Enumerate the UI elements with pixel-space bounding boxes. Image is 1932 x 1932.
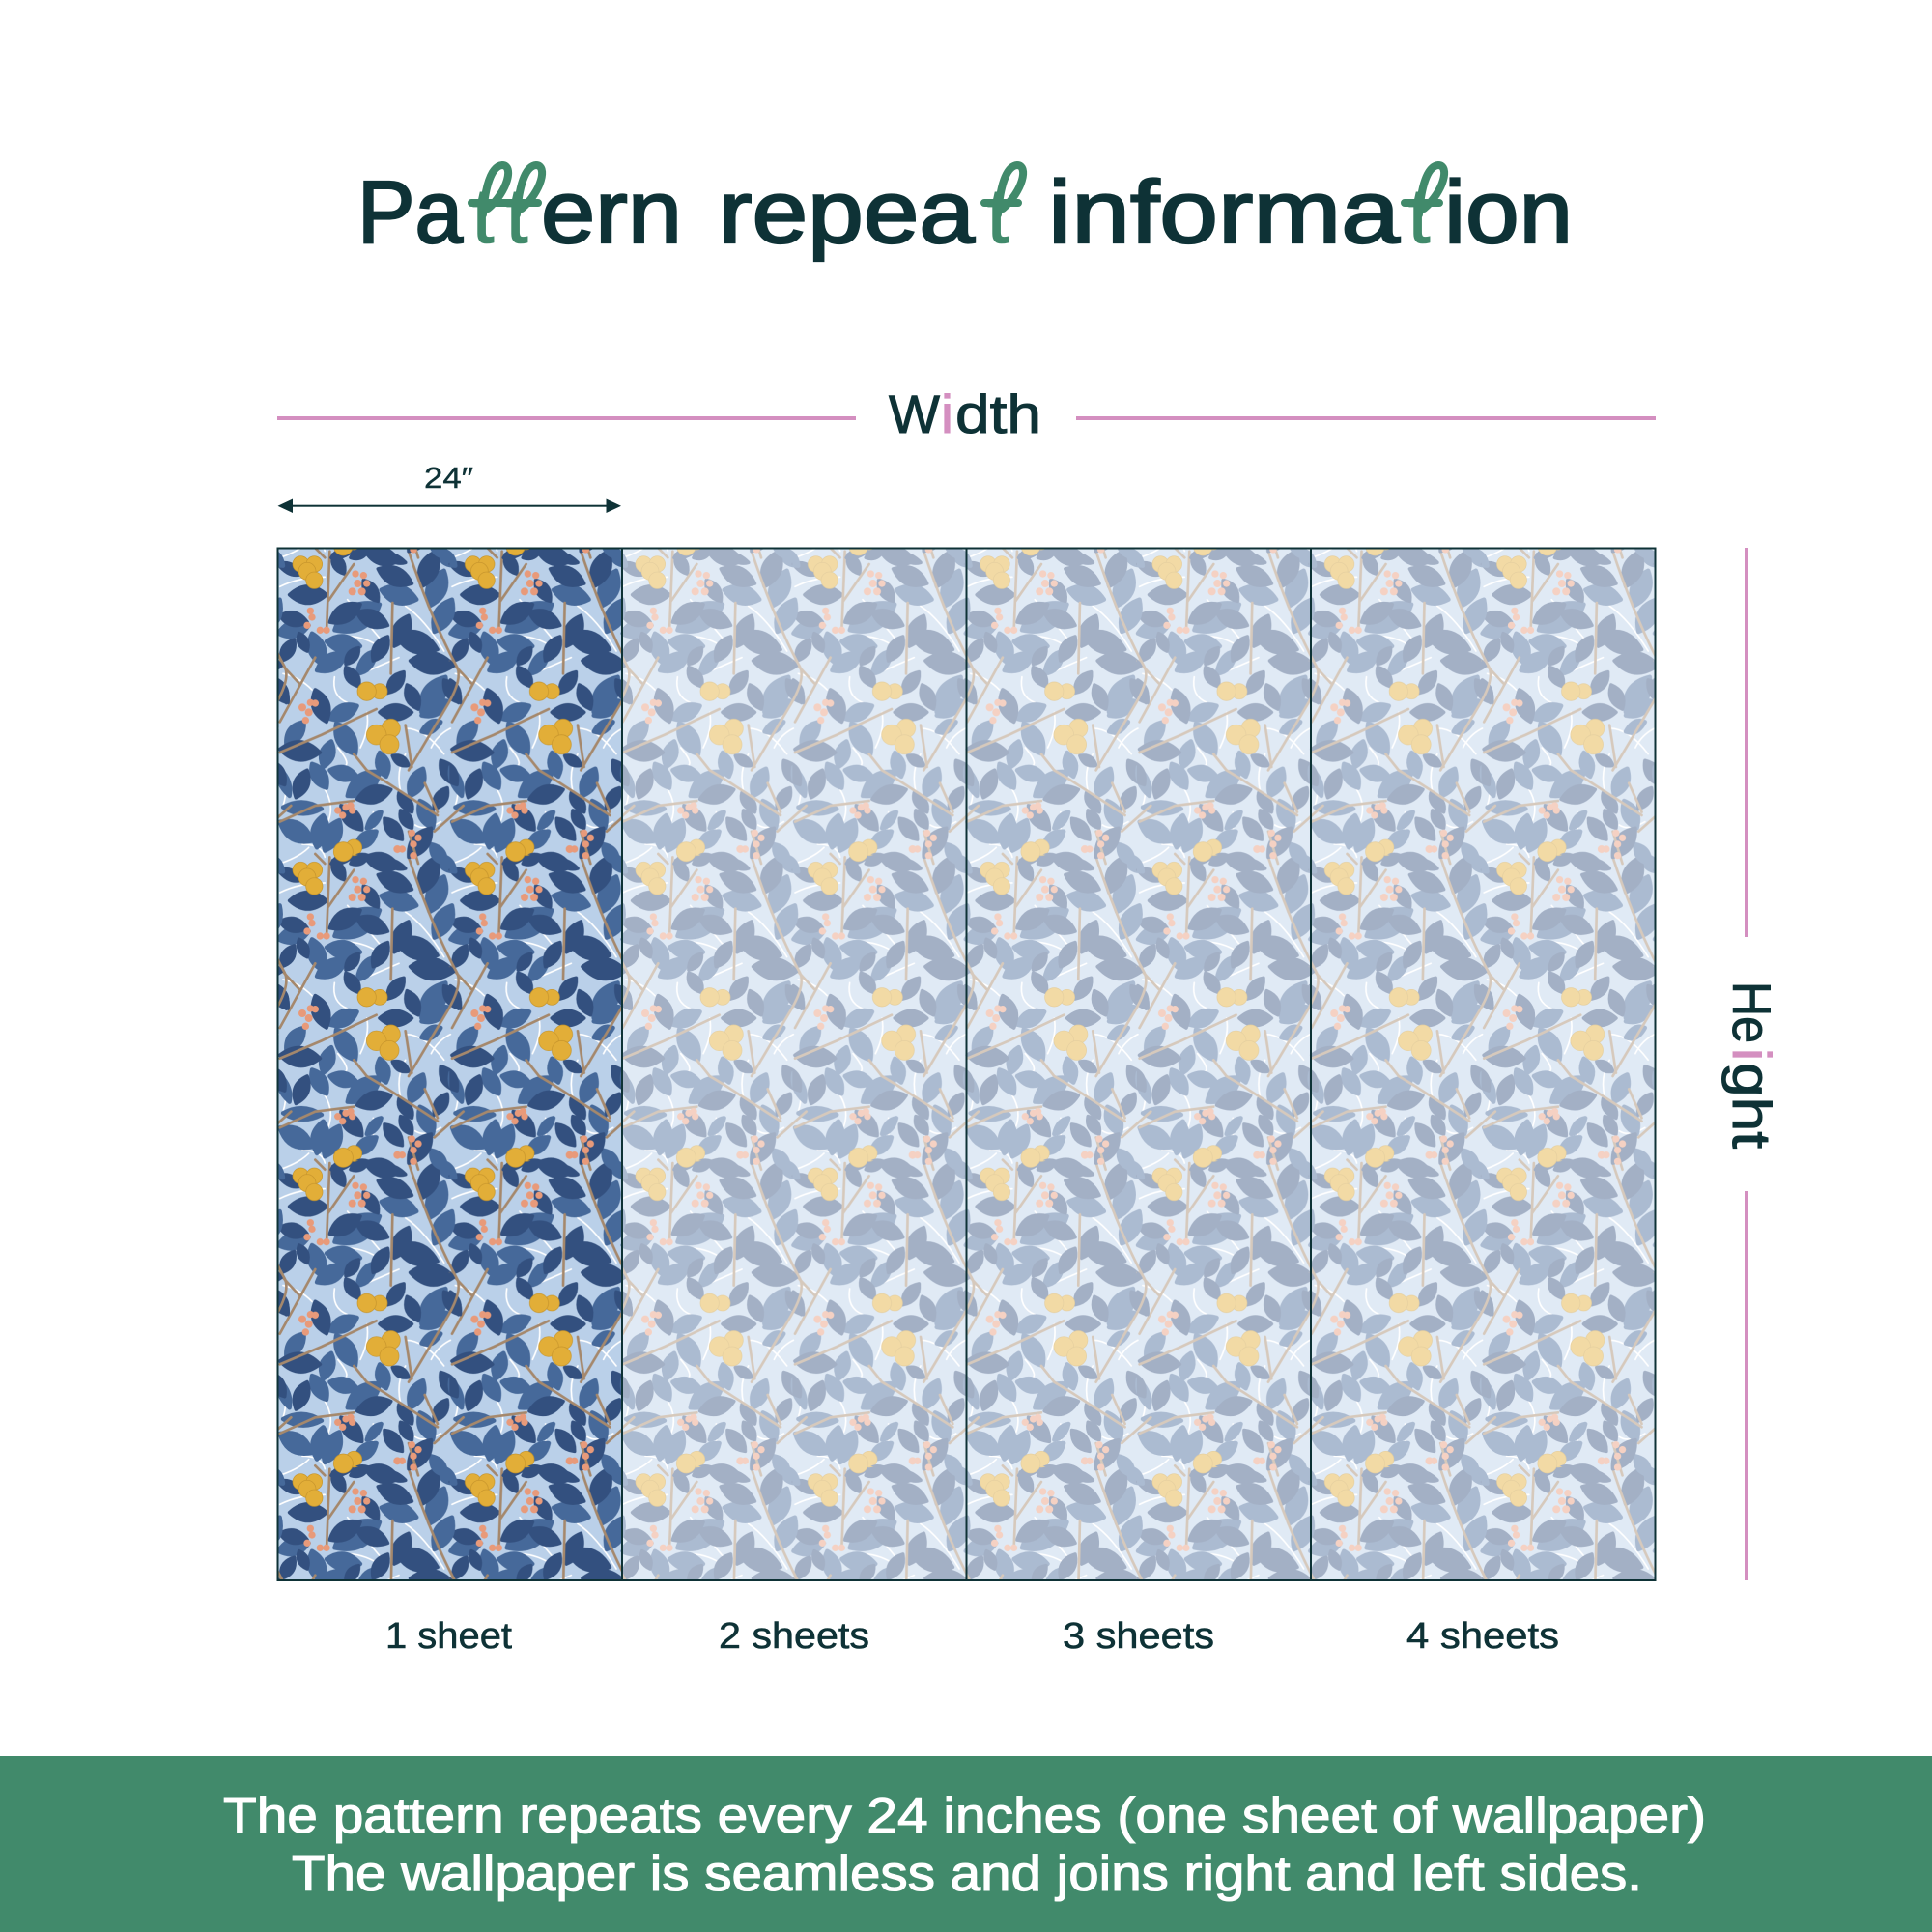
width label: W xyxy=(889,384,940,444)
sheet label 3: 3 sheets xyxy=(1063,1616,1214,1657)
title: t xyxy=(987,173,1009,259)
panel: sheet 3 (faded) xyxy=(967,549,1311,1580)
title: ern xyxy=(541,163,682,262)
sheet label 4: 4 sheets xyxy=(1406,1616,1559,1657)
footer text line 2: The wallpaper is seamless and joins right and left sides. xyxy=(292,1846,1642,1902)
panel: sheet 2 (faded) xyxy=(622,549,967,1580)
panel: sheet 1 xyxy=(278,549,622,1580)
sheet label 1: 1 sheet xyxy=(385,1616,512,1657)
24 inch label: 24″ xyxy=(424,461,473,495)
title: repea xyxy=(719,163,976,262)
footer text line 1: The pattern repeats every 24 inches (one sheet of wallpaper) xyxy=(223,1788,1706,1844)
footer banner xyxy=(0,1756,1932,1932)
height label: i xyxy=(1721,1048,1782,1061)
width label: i xyxy=(941,384,953,444)
title: t xyxy=(472,173,494,259)
height label xyxy=(1721,981,1782,1149)
sheet label 2: 2 sheets xyxy=(719,1616,869,1657)
width rule: left xyxy=(277,416,856,420)
title: ion xyxy=(1444,163,1573,262)
title xyxy=(357,163,1573,262)
height label: ght xyxy=(1721,1063,1782,1149)
height label: He xyxy=(1721,981,1782,1043)
arrow: one sheet width xyxy=(278,498,621,513)
height rule: top xyxy=(1745,548,1748,937)
panel: sheet 4 (faded) xyxy=(1311,549,1656,1580)
title: informa xyxy=(1048,163,1401,262)
width label xyxy=(889,384,1041,444)
title: Pa xyxy=(357,163,464,262)
width rule: right xyxy=(1076,416,1656,420)
height rule: bottom xyxy=(1745,1191,1748,1580)
title: t xyxy=(506,173,527,259)
width label: dth xyxy=(955,384,1041,444)
title: t xyxy=(1408,173,1430,259)
